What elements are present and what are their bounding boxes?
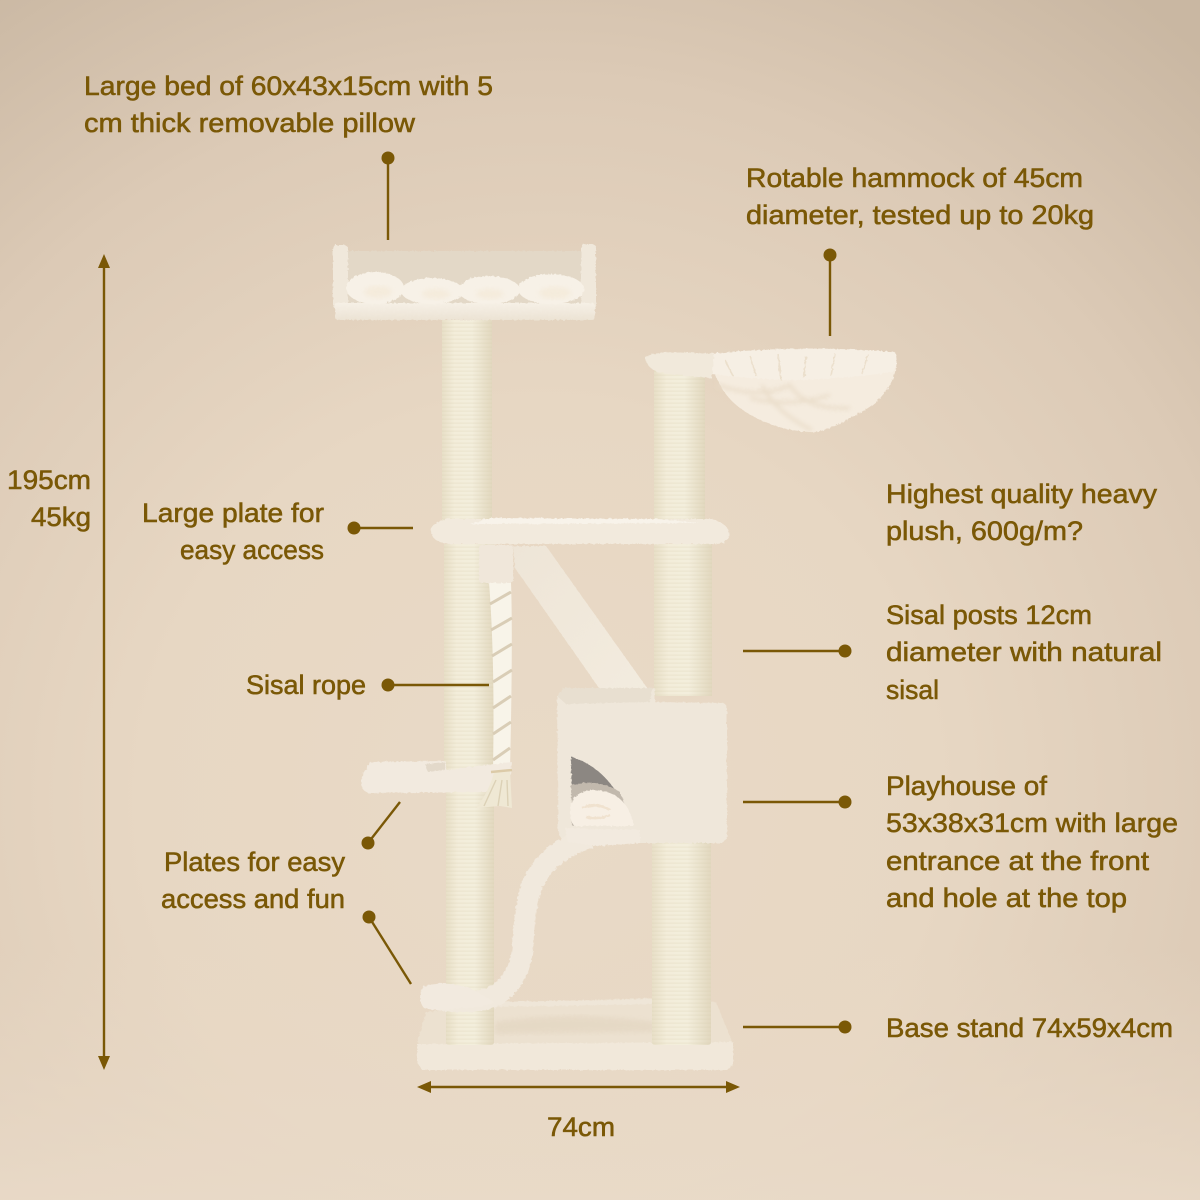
sisal rope [479, 545, 513, 770]
width dimension: 74cm [547, 1112, 615, 1142]
callout: plates: access and fun [161, 884, 345, 914]
small plate [361, 761, 512, 793]
pillow [346, 272, 584, 304]
width dimension [417, 1081, 740, 1142]
callout: plush: Highest quality heavy [886, 479, 1158, 509]
callout: sisal posts [743, 600, 1162, 705]
curved ramp [420, 828, 640, 1010]
callout: hammock: Rotable hammock of 45cm [746, 163, 1083, 193]
callout: base stand: Base stand 74x59x4cm [886, 1013, 1173, 1043]
height dimension: 45kg [31, 502, 91, 532]
height dimension: 195cm [7, 465, 91, 495]
base stand [417, 998, 733, 1070]
callout: playhouse: entrance at the front [886, 846, 1150, 876]
callout: playhouse: Playhouse of [886, 771, 1048, 801]
rope tassel [476, 770, 512, 808]
ramp [513, 546, 650, 701]
hammock [645, 348, 897, 432]
callout: sisal posts: diameter with natural [886, 637, 1162, 667]
callout: large plate: Large plate for [142, 498, 324, 528]
callout: sisal rope: Sisal rope [246, 670, 366, 700]
callout: playhouse [743, 771, 1178, 913]
callout: hammock: diameter, tested up to 20kg [746, 200, 1094, 230]
callout: base stand [743, 1013, 1173, 1043]
callout: large bed: Large bed of 60x43x15cm with 5 [84, 71, 493, 101]
callout: hammock [746, 163, 1094, 336]
callout: playhouse: 53x38x31cm with large [886, 808, 1178, 838]
top bed [333, 244, 596, 320]
callout: playhouse: and hole at the top [886, 883, 1127, 913]
cat tree product [333, 244, 897, 1070]
playhouse [557, 688, 727, 843]
middle plate [431, 518, 729, 544]
entrance opening [571, 757, 633, 826]
callout: large bed [84, 71, 493, 240]
sisal posts [442, 320, 712, 1045]
callout: plush [886, 479, 1158, 546]
height dimension [7, 254, 110, 1070]
callout: plates: Plates for easy [164, 847, 346, 877]
callout: large plate: easy access [180, 535, 324, 565]
callout: sisal posts: sisal [886, 675, 939, 705]
callout: large bed: cm thick removable pillow [84, 108, 416, 138]
callout: sisal posts: Sisal posts 12cm [886, 600, 1092, 630]
callout: sisal rope [246, 670, 489, 700]
callout: large plate [142, 498, 413, 565]
callout: plates [161, 802, 411, 984]
callout: plush: plush, 600g/m? [886, 516, 1083, 546]
